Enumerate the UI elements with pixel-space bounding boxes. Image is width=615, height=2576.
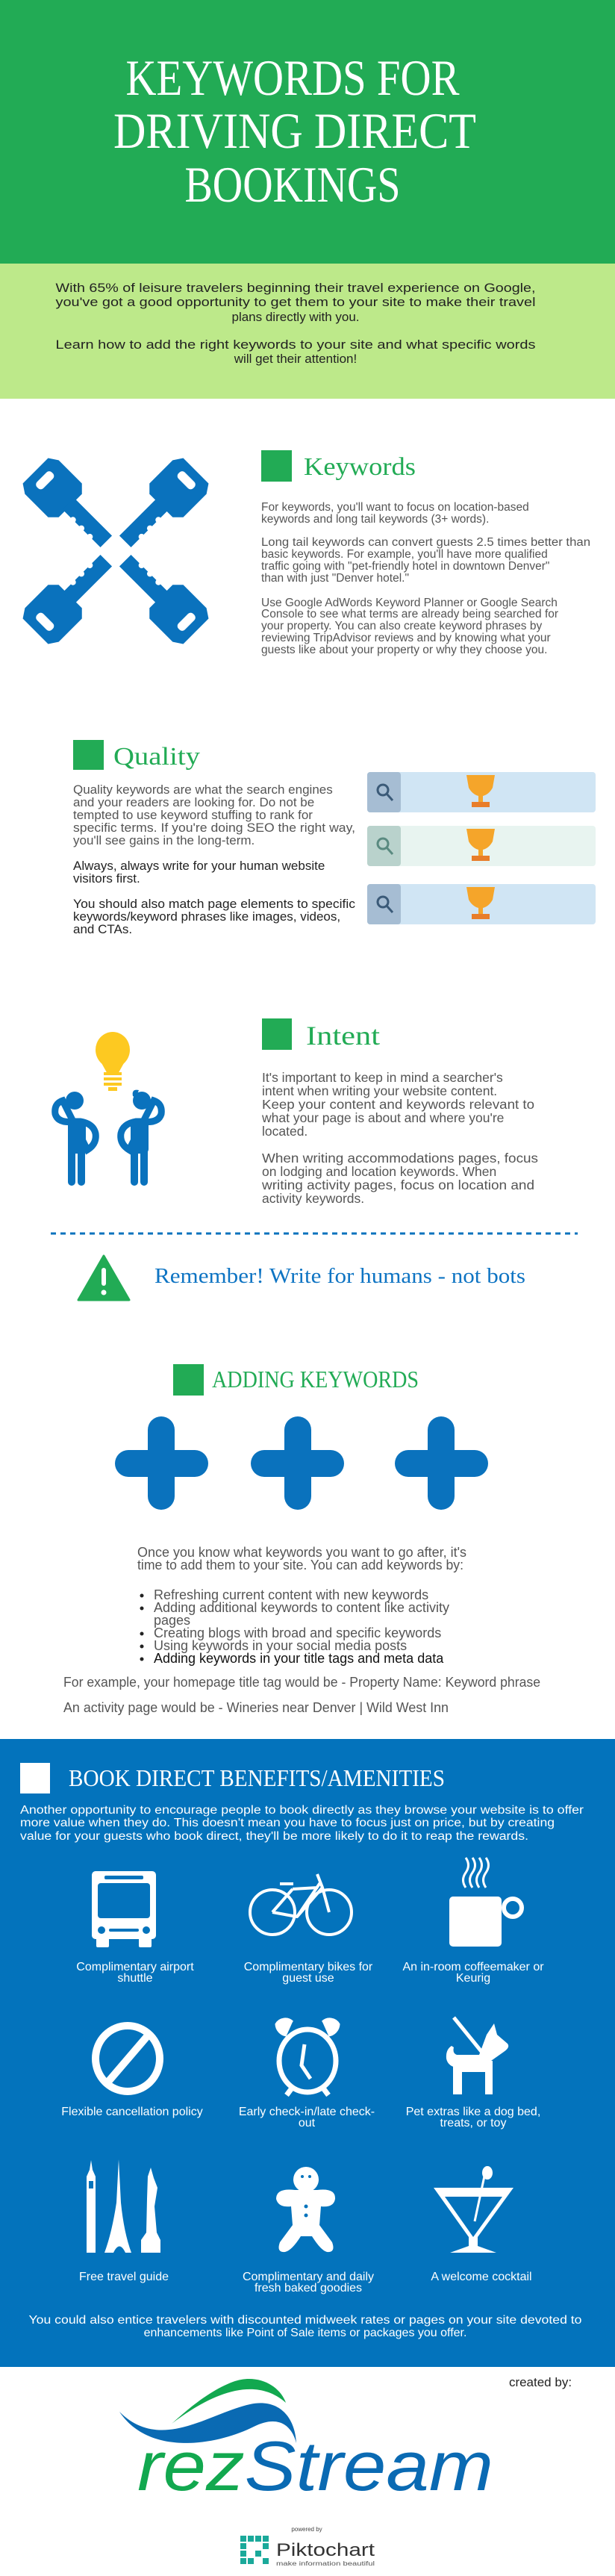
logo: rezStream: rezStream: [137, 2427, 493, 2505]
icon: landmarks travel guide: [87, 2159, 160, 2253]
text: keywords body: guests like about your property or why they choose you.: [261, 644, 547, 656]
text: intent body: Keep your content and keywords relevant to: [262, 1097, 534, 1112]
title: DRIVING DIRECT: [113, 102, 476, 159]
labels: row 3: [79, 2271, 532, 2295]
text: adding keywords body: Creating blogs with broad and specific keywords: [154, 1625, 441, 1640]
credit: created by: created by:: [509, 2375, 572, 2389]
heading: book direct: BOOK DIRECT BENEFITS/AMENITIES: [69, 1764, 445, 1791]
text: quality body: Always, always write for your human website: [73, 859, 325, 873]
logo: piktochart: Piktochart: [276, 2540, 375, 2560]
header: green title band: [0, 0, 615, 264]
icon: bicycle: [250, 1874, 352, 1935]
labels: row 3: Complimentary and daily: [243, 2271, 374, 2283]
intro text: Learn how to add the right keywords to your site and what specific words: [55, 337, 536, 352]
callout: remember: [78, 1256, 525, 1300]
icons: plus signs: [115, 1416, 488, 1510]
text: keywords body: keywords and long tail keywords (3+ words).: [261, 513, 489, 526]
title: BOOKINGS: [185, 156, 400, 213]
icon: coffee mug: [449, 1858, 522, 1947]
text: adding keywords body: Using keywords in your social media posts: [154, 1638, 407, 1653]
text: intent body: located.: [262, 1124, 308, 1139]
labels: row 1 and 2: [61, 1961, 544, 2129]
text: quality body: and your readers are looking for. Do not be: [73, 795, 314, 809]
text: quality body: You should also match page elements to specific: [73, 897, 356, 911]
text: intent body: intent when writing your website content.: [262, 1083, 497, 1098]
text: quality body: visitors first.: [73, 871, 140, 886]
text: adding keywords body: time to add them to your site. You can add keywords by:: [137, 1558, 463, 1572]
labels: row 1 and 2: Pet extras like a dog bed,: [406, 2106, 540, 2118]
heading: Keywords: Keywords: [304, 453, 416, 481]
text: quality body: you'll see gains in the long-term.: [73, 833, 255, 847]
text: keywords body: your property. You can also create keyword phrases by: [261, 620, 542, 632]
text: benefits intro: [20, 1804, 584, 1843]
heading: Quality: Quality: [113, 743, 200, 771]
text: keywords body: basic keywords. For example, you'll have more qualified: [261, 548, 548, 561]
text: keywords body: Use Google AdWords Keyword Planner or Google Search: [261, 597, 558, 609]
text: quality body: and CTAs.: [73, 922, 132, 936]
text: keywords body: reviewing TripAdvisor reviews and by knowing what your: [261, 632, 551, 644]
text: adding keywords body: Adding keywords in your title tags and meta data: [154, 1651, 444, 1666]
heading: Intent: [262, 1018, 380, 1051]
icon: bus: [92, 1871, 156, 1947]
labels: row 1 and 2: Keurig: [456, 1972, 490, 1985]
text: adding keywords body: Refreshing current content with new keywords: [154, 1587, 428, 1602]
text: adding keywords body: For example, your homepage title tag would be - Property Name: Keyword phrase: [63, 1675, 540, 1690]
text: adding keywords body: Once you know what keywords you want to go after, it's: [137, 1545, 466, 1560]
labels: row 1 and 2: guest use: [282, 1972, 334, 1985]
labels: row 3: Free travel guide: [79, 2271, 169, 2283]
labels: row 1 and 2: out: [299, 2117, 316, 2129]
text: quality body: tempted to use keyword stuffing to rank for: [73, 808, 313, 822]
text: intent body: [261, 1070, 538, 1206]
title: KEYWORDS FOR: [125, 49, 460, 106]
text: adding keywords body: [63, 1545, 540, 1715]
labels: row 1 and 2: An in-room coffeemaker or: [402, 1961, 544, 1973]
labels: row 1 and 2: Early check-in/late check-: [239, 2106, 375, 2118]
text: keywords body: [261, 501, 590, 656]
text: keywords body: Console to see what terms are already being searched for: [261, 608, 558, 620]
text: keywords body: For keywords, you'll want to focus on location-based: [261, 501, 529, 514]
text: intent body: on lodging and location keywords. When: [262, 1164, 496, 1179]
icon: no sign: [96, 2026, 160, 2091]
text: closing: enhancements like Point of Sale items or packages you offer.: [144, 2327, 466, 2339]
icon: four keys: [19, 454, 213, 648]
text: quality body: [73, 783, 356, 936]
intro band: [0, 264, 615, 399]
intro text: [55, 281, 536, 366]
intro text: you've got a good opportunity to get them to your site to make their travel: [55, 295, 536, 309]
icon: dog on leash: [446, 2017, 508, 2094]
intro text: With 65% of leisure travelers beginning their travel experience on Google,: [55, 281, 536, 295]
title: [113, 49, 476, 213]
text: intent body: writing activity pages, focus on location and: [261, 1177, 534, 1192]
text: keywords body: Long tail keywords can convert guests 2.5 times better than: [261, 536, 590, 549]
text: intent body: It's important to keep in mind a searcher's: [262, 1070, 503, 1085]
icon: alarm clock: [276, 2019, 339, 2095]
icon: cocktail: [434, 2166, 513, 2253]
labels: row 1 and 2: Complimentary bikes for: [244, 1961, 373, 1973]
labels: row 1 and 2: Flexible cancellation policy: [61, 2106, 203, 2118]
labels: row 3: A welcome cocktail: [431, 2271, 532, 2283]
heading: Adding keywords: [173, 1364, 419, 1396]
heading: Quality: [73, 740, 200, 771]
text: adding keywords body: An activity page would be - Wineries near Denver | Wild West Inn: [63, 1700, 449, 1715]
labels: row 1 and 2: Complimentary airport: [76, 1961, 194, 1973]
logo: rezStream: [119, 2379, 493, 2505]
text: benefits intro: value for your guests who book direct, they'll be more likely to do it to reap the rewards.: [20, 1830, 528, 1843]
text: closing: You could also entice travelers with discounted midweek rates or pages on your site devoted to: [28, 2314, 582, 2327]
search bars with trophies: [367, 772, 596, 924]
text: quality body: keywords/keyword phrases like images, videos,: [73, 909, 340, 924]
icon: gingerbread man: [276, 2167, 335, 2252]
text: quality body: Quality keywords are what the search engines: [73, 783, 333, 797]
text: benefits intro: Another opportunity to encourage people to book directly as they browse your website is to offer: [20, 1804, 584, 1817]
intro text: will get their attention!: [234, 352, 357, 366]
text: quality body: specific terms. If you're doing SEO the right way,: [73, 821, 355, 835]
labels: row 1 and 2: shuttle: [117, 1972, 153, 1985]
intro text: plans directly with you.: [231, 310, 360, 324]
heading: Adding keywords: ADDING KEYWORDS: [212, 1366, 419, 1393]
text: intent body: When writing accommodations pages, focus: [262, 1151, 538, 1166]
text: intent body: activity keywords.: [262, 1191, 364, 1206]
logo: piktochart: make information beautiful: [276, 2560, 375, 2567]
text: closing: [28, 2314, 582, 2339]
labels: row 3: fresh baked goodies: [255, 2282, 362, 2295]
text: adding keywords body: Adding additional keywords to content like activity: [154, 1600, 449, 1615]
text: adding keywords body: pages: [154, 1613, 190, 1628]
text: keywords body: than with just "Denver hotel.": [261, 572, 409, 585]
text: intent body: what your page is about and where you're: [261, 1110, 504, 1125]
logo: piktochart: [240, 2526, 375, 2567]
callout: remember: Remember! Write for humans - not bots: [154, 1265, 525, 1288]
text: benefits intro: more value when they do. This doesn't mean you have to focus just on price, but by creating: [20, 1817, 555, 1829]
text: keywords body: traffic going with "pet-friendly hotel in downtown Denver": [261, 560, 549, 573]
panel: book direct benefits: [0, 1739, 615, 2367]
labels: row 1 and 2: treats, or toy: [440, 2117, 506, 2129]
logo: piktochart: powered by: [291, 2526, 322, 2533]
heading: Keywords: [261, 450, 416, 482]
heading: Intent: Intent: [306, 1021, 380, 1051]
icon: lightbulb and two thinking people: [55, 1032, 161, 1186]
